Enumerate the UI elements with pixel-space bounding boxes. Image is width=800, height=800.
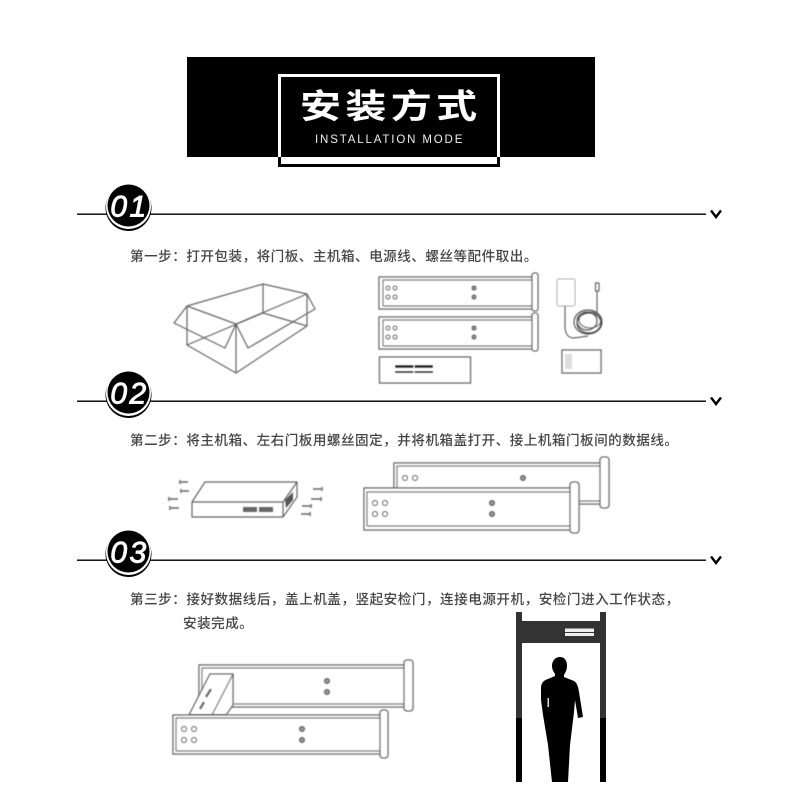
step 03 illustration: box lid	[189, 674, 233, 715]
step 01 illustration: carton	[174, 284, 315, 373]
step 01 text: 第一步：打开包装，将门板、主机箱、电源线、螺丝等配件取出。	[130, 248, 538, 264]
step 03 text: 安装完成。	[183, 615, 253, 631]
step 03 illustration: front door panel	[173, 710, 388, 758]
step 01 illustration: control box	[380, 357, 470, 383]
step 02 header	[77, 371, 721, 418]
step 01 illustration: door panel 1	[379, 273, 538, 311]
person silhouette	[541, 657, 583, 782]
step 02 illustration: rear door panel	[394, 457, 609, 508]
step 03 header	[77, 530, 721, 577]
screws	[169, 480, 322, 516]
step 03 text: 第三步：接好数据线后，盖上机盖，竖起安检门，连接电源开机，安检门进入工作状态，	[130, 591, 680, 607]
step 03 illustration: rear door panel	[199, 660, 413, 711]
step 01 header: 01	[110, 190, 149, 224]
step 02 illustration: front door panel	[364, 482, 579, 533]
step 01 illustration: power adapter	[557, 279, 602, 338]
step 03 illustration: assembled security gate	[516, 612, 606, 782]
step 03 header: 03	[110, 536, 149, 570]
title: English: INSTALLATION MODE	[315, 134, 464, 146]
title: Chinese: 安装方式	[300, 88, 482, 125]
step 01 illustration: small manual box	[562, 350, 601, 373]
step 01 illustration: door panel 2	[379, 313, 538, 351]
step 02 text: 第二步：将主机箱、左右门板用螺丝固定，并将机箱盖打开、接上机箱门板间的数据线。	[130, 432, 678, 448]
step 03 text	[130, 591, 680, 631]
title banner	[187, 57, 595, 167]
step 02 header: 02	[110, 378, 149, 410]
step 01 header	[77, 184, 721, 231]
step 02 illustration: main box with screws	[169, 480, 322, 517]
